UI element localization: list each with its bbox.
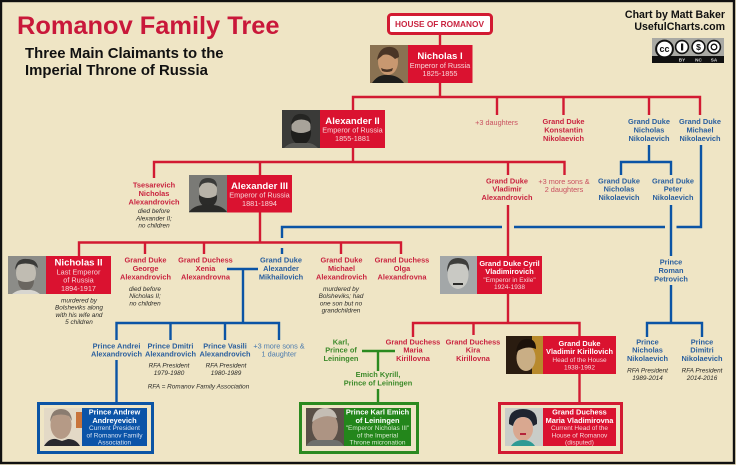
label: Michael Nikolaevich: Michael (686, 126, 714, 134)
panel: Grand Duke Vladimir Kirillovich: Head of the House (552, 357, 607, 364)
panel: claimant Grand Duchess Maria: Maria Vladimirovna (546, 416, 614, 425)
panel: claimant Prince Andrew: of Romanov Family (86, 432, 143, 440)
panel: Grand Duke Vladimir Kirillovich: Vladimir Kirillovich (546, 347, 613, 356)
panel: Alexander II: 1855-1881 (335, 134, 370, 143)
note: Dimitri RFA: RFA President (682, 368, 723, 374)
panel: claimant Prince Karl Emich: "Emperor Nicholas III" (346, 425, 410, 432)
label: Peter Nikolaevich: Peter (664, 185, 682, 194)
note: Nicholas II: 5 children (65, 319, 93, 326)
panel: Alexander III: Emperor of Russia (229, 190, 291, 200)
note: George: Nicholas II; (129, 293, 161, 300)
panel: Alexander III: Alexander III (231, 181, 288, 192)
label: Karl: Karl, (333, 337, 349, 346)
note: Michael: one son but no (320, 300, 363, 307)
panel: Alexander II: Emperor of Russia (322, 126, 384, 135)
icon: creative commons badge: BY (679, 58, 685, 62)
panel: claimant Prince Karl Emich: of the Imperial (357, 432, 399, 440)
panel: Nicholas II (8, 256, 111, 294)
house of romanov box (388, 14, 492, 34)
panel: Alexander III (189, 175, 292, 212)
label: Tsesarevich Nicholas: Nicholas (139, 189, 169, 198)
label: Prince Nicholas: Nicholas (632, 346, 663, 355)
icon: creative commons badge (652, 38, 724, 63)
panel: claimant Prince Karl Emich: Prince Karl Emich (346, 408, 410, 417)
icon: creative commons badge: cc (659, 44, 670, 54)
panel: claimant Prince Andrew (38, 404, 152, 452)
panel: Nicholas I: 1825-1855 (423, 69, 457, 78)
panel: Nicholas II: Nicholas II (55, 258, 103, 268)
label: Vasili: Prince Vasili (203, 341, 247, 350)
note: Nicholas II: with his wife and (56, 312, 103, 319)
label: Roman Petrovich: Petrovich (654, 274, 688, 284)
panel: Grand Duke Cyril: "Emperor in Exile" (483, 277, 536, 284)
label: George: George (133, 264, 158, 273)
panel: Nicholas II: of Russia (63, 276, 95, 285)
label: Maria Kirillovna: Kirillovna (396, 354, 431, 363)
panel: Grand Duke Cyril: 1924-1938 (494, 284, 525, 291)
label: Karl: Leiningen (324, 354, 359, 363)
panel: Grand Duke Cyril: Grand Duke Cyril (479, 259, 540, 268)
label: Michael Alexandrovich: Alexandrovich (316, 272, 367, 282)
label: Vladimir Alexandrovich: Grand Duke (486, 176, 528, 185)
panel: claimant Prince Andrew: Current President (89, 425, 140, 432)
panel: claimant Grand Duchess Maria (500, 404, 622, 452)
label: Emich Kyrill: Emich Kyrill, (356, 370, 400, 379)
label: Michael Alexandrovich: Michael (328, 264, 355, 273)
label: Tsesarevich Nicholas: Tsesarevich (133, 181, 176, 190)
label: Peter Nikolaevich: Nikolaevich (652, 193, 694, 202)
label: +3 more sons: +3 more sons & (538, 177, 590, 186)
note: Dmitri RFA: 1979-1980 (154, 370, 185, 377)
label: Roman Petrovich: Prince (660, 258, 682, 267)
icon: creative commons badge: $ (696, 42, 701, 52)
label: Xenia: Xenia (196, 264, 216, 273)
label: Alexander Mikhailovich: Alexander (263, 264, 299, 273)
note: Nicholas II: murdered by (61, 297, 98, 304)
blue lineage lines (116, 145, 702, 402)
panel: claimant Prince Andrew: Andreyevich (92, 416, 137, 425)
note: Nicholas RFA: RFA President (627, 368, 668, 374)
label: Maria Kirillovna: Maria (403, 346, 424, 355)
label: Michael Nikolaevich: Nikolaevich (679, 134, 721, 143)
label: Dmitri Alexandrovich: Alexandrovich (145, 350, 196, 359)
red lineage lines (79, 34, 700, 402)
note: Michael: Bolsheviks; had (319, 293, 364, 300)
label: Andrei: Prince Andrei (93, 341, 140, 350)
label: Nicholas Nikolaevich the younger: Grand Duke (598, 176, 640, 185)
label: Andrei: Alexandrovich (91, 350, 142, 359)
label: Xenia: Grand Duchess (178, 256, 233, 265)
panel: Alexander III: 1881-1894 (242, 199, 277, 208)
label: Konstantin: Grand Duke (543, 117, 584, 126)
note: Michael: grandchildren (322, 308, 361, 315)
panel: Nicholas I (370, 45, 472, 83)
label: Vasili: Alexandrovich (200, 350, 251, 359)
icon: creative commons badge: NC (695, 58, 702, 62)
credit: UsefulCharts.com (634, 21, 725, 33)
note: Dimitri RFA: 2014-2016 (686, 375, 718, 382)
panel: claimant Prince Andrew: Association (98, 440, 131, 446)
label: Vladimir Alexandrovich: Vladimir (492, 185, 522, 194)
label: Vladimir Alexandrovich: Alexandrovich (482, 193, 533, 202)
note: RFA legend: RFA = Romanov Family Association (148, 384, 250, 390)
panel: claimant Prince Karl Emich (300, 404, 418, 452)
note: George: no children (129, 300, 161, 307)
panel: claimant Grand Duchess Maria: Current Head of the (551, 425, 608, 432)
panel: Alexander II (282, 110, 385, 148)
panel: Alexander II: Alexander II (325, 116, 380, 127)
label: Prince Dimitri: Nikolaevich (681, 354, 723, 363)
panel: Nicholas I: Nicholas I (417, 51, 463, 62)
panel: Grand Duke Cyril (440, 256, 542, 294)
label: Xenia: Alexandrovna (181, 272, 231, 282)
label: Kira Kirillovna: Kira (466, 346, 481, 355)
panel: Nicholas II: 1894-1917 (61, 284, 96, 293)
label: Prince Nicholas: Prince (636, 337, 659, 346)
label: Olga: Grand Duchess (375, 256, 429, 265)
label: Olga: Olga (394, 264, 411, 273)
panel: claimant Prince Karl Emich: of Leiningen (356, 416, 400, 425)
label: Prince Dimitri: Dimitri (690, 346, 714, 355)
label: +3 more sons: 1 daughter (262, 350, 297, 359)
label: Karl: Prince of (325, 346, 357, 355)
note: Tsesarevich: died before (138, 208, 170, 215)
note: Tsesarevich: no children (138, 223, 170, 230)
panel: claimant Grand Duchess Maria: (disputed) (565, 440, 594, 446)
label: Michael Nikolaevich: Grand Duke (679, 117, 721, 126)
note: Vasili RFA: 1980-1989 (211, 370, 242, 377)
label: Dmitri Alexandrovich: Prince Dmitri (147, 341, 194, 350)
label: Kira Kirillovna: Grand Duchess (446, 337, 500, 346)
label: George: Grand Duke (125, 256, 166, 265)
panel: Nicholas II: Last Emperor (57, 268, 101, 276)
label: Prince Nicholas: Nikolaevich (627, 354, 669, 363)
label: Konstantin: Nikolaevich (543, 134, 585, 143)
panel: claimant Prince Andrew: Prince Andrew (89, 408, 140, 417)
note: Vasili RFA: RFA President (206, 363, 247, 370)
green lineage lines (362, 351, 395, 402)
panel: claimant Grand Duchess Maria: House of Romanov (552, 432, 608, 440)
panel: Grand Duke Vladimir Kirillovich: Grand Duke (559, 339, 600, 348)
panel: claimant Grand Duchess Maria: Grand Duchess (552, 408, 607, 417)
label: Maria Kirillovna: Grand Duchess (386, 337, 440, 346)
label: Roman Petrovich: Roman (658, 266, 684, 275)
label: Nicholas Nikolaevich the younger: Nikolaevich (598, 193, 640, 202)
note: Dmitri RFA: RFA President (149, 363, 190, 370)
panel: Nicholas I: Emperor of Russia (410, 61, 471, 70)
label: +3 more sons: 2 daughters (545, 185, 584, 194)
note: Michael: murdered by (323, 286, 360, 293)
subtitle: Imperial Throne of Russia (25, 63, 209, 79)
label: Prince Dimitri: Prince (691, 337, 713, 346)
label: Olga: Alexandrovna (378, 272, 427, 282)
label: Peter Nikolaevich: Grand Duke (652, 176, 694, 185)
label: Michael Alexandrovich: Grand Duke (321, 256, 362, 265)
note: Nicholas II: Bolsheviks along (55, 305, 103, 312)
label: Nicholas Nikolaevich the younger: Nicholas (604, 185, 634, 194)
label: Tsesarevich Nicholas: Alexandrovich (129, 198, 180, 206)
panel: Grand Duke Vladimir Kirillovich: 1938-1992 (564, 364, 595, 372)
label: Nicholas Nikolaevich: Nikolaevich (628, 134, 670, 143)
label: Nicholas Nikolaevich: Grand Duke (628, 117, 670, 126)
title: Romanov Family Tree (17, 12, 279, 40)
label: Alexander Mikhailovich: Grand Duke (260, 256, 302, 265)
house of romanov box: HOUSE OF ROMANOV (395, 19, 484, 29)
label: Konstantin: Konstantin (544, 126, 583, 134)
icon: creative commons badge: SA (711, 58, 718, 62)
label: Nicholas Nikolaevich: Nicholas (634, 126, 664, 134)
credit: Chart by Matt Baker (625, 9, 725, 21)
note: Tsesarevich: Alexander II; (135, 215, 172, 222)
note: Nicholas RFA: 1989-2014 (632, 375, 663, 382)
panel: claimant Prince Karl Emich: Throne micronation (350, 440, 406, 446)
label: Kira Kirillovna: Kirillovna (456, 354, 491, 363)
label: +3 more sons: +3 more sons & (253, 341, 305, 350)
note: George: died before (129, 286, 161, 293)
panel: Grand Duke Vladimir Kirillovich (506, 336, 616, 374)
panel: Grand Duke Cyril: Vladimirovich (485, 267, 534, 276)
subtitle: Three Main Claimants to the (25, 46, 224, 62)
label: Emich Kyrill: Prince of Leiningen (344, 378, 413, 387)
label: George: Alexandrovich (120, 272, 171, 282)
label: Alexander Mikhailovich: Mikhailovich (259, 272, 304, 282)
label: +3 daughters: +3 daughters (475, 118, 518, 127)
